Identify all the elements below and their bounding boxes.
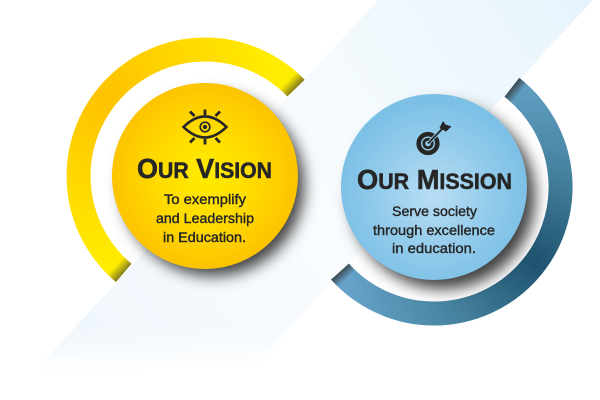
vision text: and Leadership: [156, 210, 254, 226]
vision ring arc: [79, 50, 296, 273]
panel: our mission: [340, 87, 561, 314]
panel: our vision: [79, 50, 304, 276]
mission ring arc: [340, 87, 561, 314]
mission text: Serve society: [392, 203, 477, 219]
mission text: in education.: [392, 240, 476, 256]
vision text: To exemplify: [164, 191, 246, 207]
icon: eye: [184, 110, 226, 144]
background diagonal band: [55, 0, 593, 350]
vision text: [156, 191, 254, 245]
vision text: in Education.: [163, 229, 246, 245]
vision circle: [112, 83, 298, 269]
mission text: [373, 203, 495, 256]
mission circle shadow: [351, 105, 535, 289]
mission circle: [341, 94, 527, 280]
icon: target: [419, 121, 452, 153]
vision heading: OUR VISION: [137, 153, 272, 184]
vision circle shadow: [122, 94, 304, 276]
mission heading: OUR MISSION: [357, 164, 512, 195]
mission text: through excellence: [373, 222, 495, 238]
